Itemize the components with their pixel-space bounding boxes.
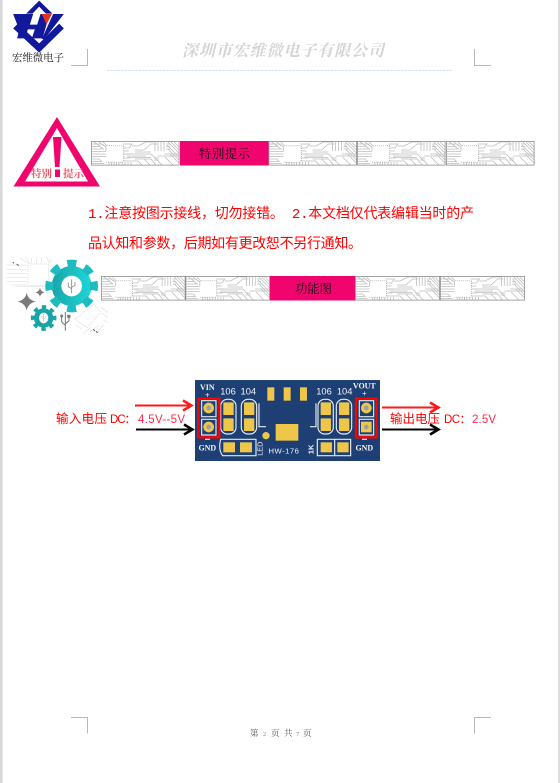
diagram: HW-176 circuit board	[195, 380, 380, 461]
header company name: 深圳市宏维微电子有限公司	[182, 42, 386, 60]
diagram: HW-176 circuit board: 106	[316, 387, 332, 397]
star sparkles	[18, 293, 36, 311]
page number footer: 第	[250, 728, 259, 738]
label: input voltage: 4.5V--5V	[138, 414, 185, 426]
logo caption: 宏维微电子	[12, 51, 64, 64]
diagram: HW-176 circuit board: LED	[256, 442, 265, 456]
arrow: input negative	[136, 424, 192, 434]
icon: warning triangle: 特别	[31, 167, 52, 180]
diagram: HW-176 circuit board: VIN	[200, 383, 215, 392]
diagram: HW-176 circuit board: GND	[198, 444, 216, 453]
page number footer: 页	[303, 728, 312, 738]
label: output voltage: 输出电压	[390, 411, 440, 426]
page number footer: 2	[263, 731, 266, 738]
banner heading: 功能图	[295, 281, 332, 296]
notice text	[88, 205, 474, 253]
page number footer: 7	[296, 731, 300, 738]
label: input voltage: DC：	[110, 414, 136, 426]
page number footer: 页	[271, 728, 280, 738]
diagram: HW-176 circuit board: 106	[220, 387, 236, 397]
diagram: HW-176 circuit board: HW-176	[269, 446, 299, 455]
page number footer	[250, 728, 312, 738]
diagram: HW-176 circuit board: VOUT	[353, 382, 376, 391]
arrow: output negative	[382, 424, 438, 434]
label: output voltage	[390, 411, 496, 426]
large gear	[45, 260, 98, 312]
diagram: HW-176 circuit board: GND	[355, 444, 373, 453]
page number footer: 共	[284, 728, 293, 738]
icon: warning triangle: 提示	[63, 167, 85, 180]
diagram: HW-176 circuit board: 104	[337, 387, 352, 397]
label: output voltage: 2.5V	[472, 414, 496, 426]
label: output voltage: DC：	[444, 414, 471, 426]
notice text: 1.注意按图示接线，切勿接错。 2.本文档仅代表编辑当时的产	[88, 205, 474, 223]
notice text: 品认知和参数，后期如有更改恕不另行通知。	[88, 235, 362, 253]
arrow: output positive	[382, 402, 438, 412]
arrow: input positive	[135, 400, 192, 410]
diagram: HW-176 circuit board: 104	[241, 387, 256, 397]
banner: special notice	[91, 141, 534, 166]
diagram: HW-176 circuit board: 1K	[307, 444, 316, 454]
diagram: HW-176 circuit board: +	[205, 391, 210, 400]
icon: company logo	[12, 1, 64, 64]
icon: gears and circuit decoration	[7, 257, 108, 333]
small gear	[31, 305, 56, 331]
banner: function diagram	[101, 276, 525, 300]
banner heading: 特别提示	[199, 146, 250, 161]
diagram: HW-176 circuit board: +	[362, 390, 367, 399]
icon: warning triangle	[14, 117, 100, 186]
label: input voltage	[56, 411, 185, 426]
label: input voltage: 输入电压	[56, 411, 107, 426]
USB symbol	[61, 312, 70, 331]
